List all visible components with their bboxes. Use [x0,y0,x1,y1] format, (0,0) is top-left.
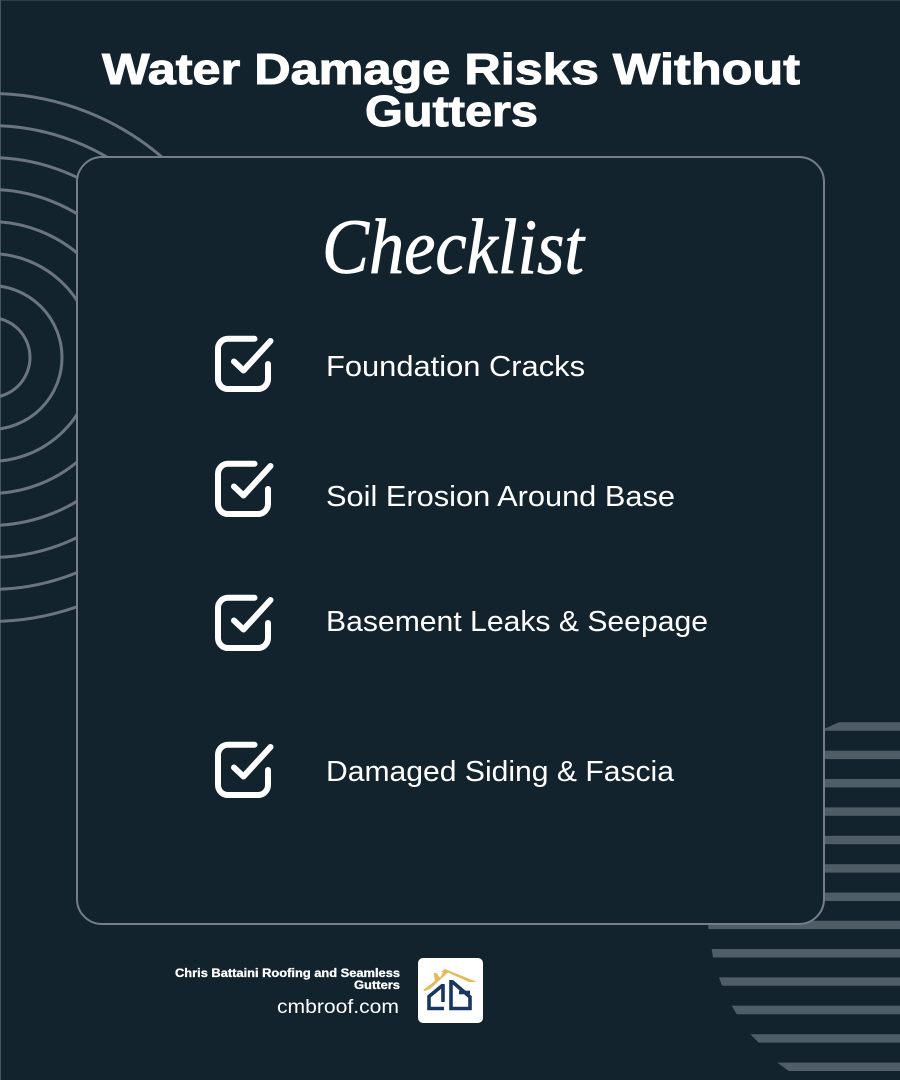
icon: checkbox [218,464,270,514]
logo letters [429,980,470,1008]
logo roof [423,969,477,991]
checklist item: Foundation Cracks: Foundation Cracks [326,351,585,383]
title [102,45,800,136]
checklist item: Soil Erosion Around Base [218,464,675,514]
icon: checkbox [218,745,270,795]
footer: company name [175,968,400,992]
decorative concentric rings [0,94,254,622]
footer: company name: Chris Battaini Roofing and Seamless [175,968,400,980]
checklist item: Damaged Siding & Fascia [218,745,675,795]
checklist item: Soil Erosion Around Base: Soil Erosion Around Base [326,481,675,513]
checklist item: Basement Leaks & Seepage: Basement Leaks & Seepage [326,606,708,638]
decorative striped circle [708,722,900,1071]
icon: checkbox [218,598,270,648]
checklist item: Foundation Cracks [218,339,585,389]
logo [418,958,483,1023]
panel: checklist [77,157,824,924]
icon: checkbox [218,339,270,389]
checklist item: Basement Leaks & Seepage [218,598,708,648]
checklist item: Damaged Siding & Fascia: Damaged Siding & Fascia [326,756,675,788]
footer: website: cmbroof.com [277,997,399,1018]
title: Water Damage Risks Without [102,45,800,94]
footer: company name: Gutters [354,980,400,992]
title: Gutters [365,87,538,136]
heading: Checklist: Checklist [322,203,586,290]
